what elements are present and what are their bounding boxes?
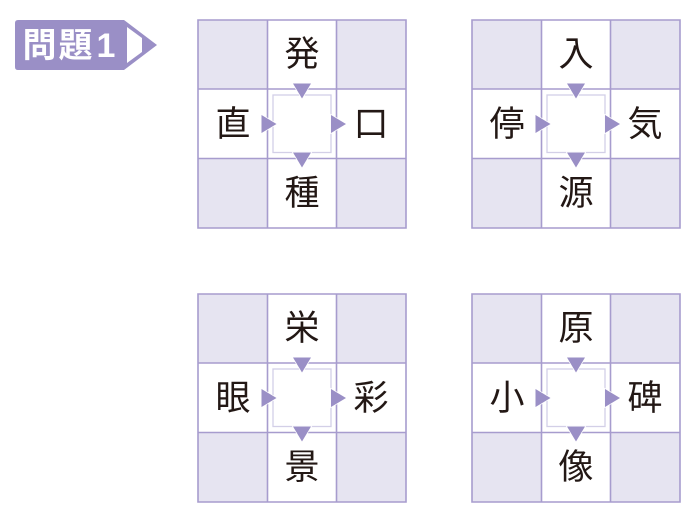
heading badge: 問題1: 問 bbox=[22, 27, 56, 65]
puzzle grid: bottom right: 小 bbox=[489, 379, 525, 418]
puzzle grid: top left: 口 bbox=[353, 105, 389, 144]
puzzle grid: bottom right: 碑 bbox=[627, 379, 663, 418]
puzzle grid: top left bbox=[198, 20, 406, 228]
puzzle grid: top right: 気 bbox=[627, 105, 663, 144]
puzzle grid: bottom right bbox=[472, 294, 680, 502]
puzzle grid: bottom left: 栄 bbox=[284, 309, 320, 348]
puzzle grid: bottom right: 原 bbox=[558, 309, 594, 348]
puzzle grid: top right: 源 bbox=[558, 174, 594, 213]
puzzle grid: top right bbox=[472, 20, 680, 228]
puzzle grid: top left: 直 bbox=[215, 105, 251, 144]
puzzle grid: top right: 入 bbox=[558, 35, 594, 74]
puzzle grid: bottom left: 景 bbox=[284, 448, 320, 487]
puzzle grid: top right: 停 bbox=[489, 105, 525, 144]
puzzle grid: bottom right: 像 bbox=[558, 448, 594, 487]
puzzle grid: top left: 種 bbox=[284, 174, 320, 213]
puzzle grid: top left: 発 bbox=[284, 35, 320, 74]
heading badge: 問題1: 題 bbox=[58, 27, 92, 65]
heading badge: 問題1: 1 bbox=[97, 27, 115, 65]
puzzle grid: bottom left bbox=[198, 294, 406, 502]
heading badge: 問題1 bbox=[15, 20, 157, 70]
puzzle grid: bottom left: 眼 bbox=[215, 379, 251, 418]
puzzle grid: bottom left: 彩 bbox=[353, 379, 389, 418]
